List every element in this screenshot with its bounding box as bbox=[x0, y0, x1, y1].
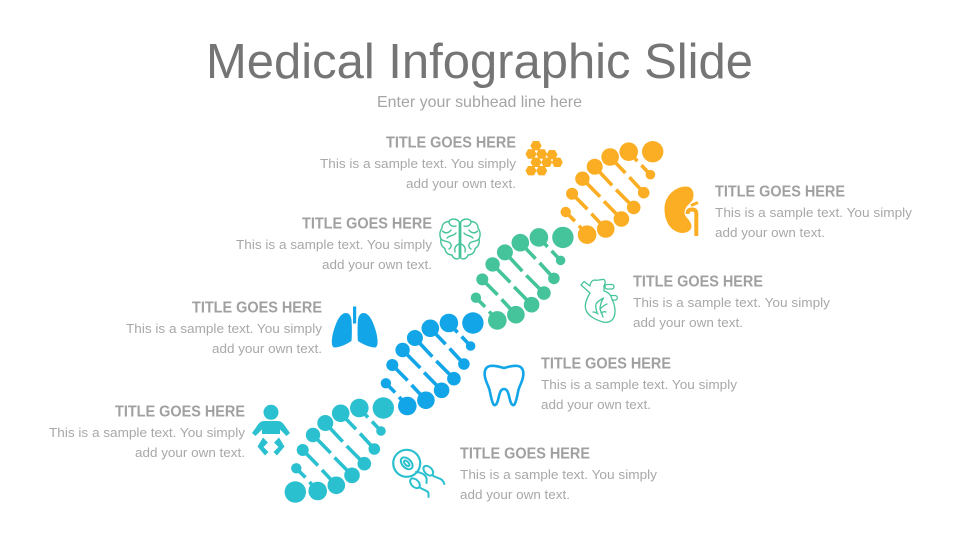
text block: brain: add your own text. bbox=[322, 257, 432, 272]
text block: egg and sperm: TITLE GOES HERE bbox=[460, 446, 590, 462]
subhead: Enter your subhead line here bbox=[377, 94, 582, 111]
text block: lungs: TITLE GOES HERE bbox=[192, 300, 322, 316]
icon: honeycomb bbox=[526, 141, 563, 175]
text block: lungs: add your own text. bbox=[212, 341, 322, 356]
text block: baby: add your own text. bbox=[135, 445, 245, 460]
text block: tooth: add your own text. bbox=[541, 397, 651, 412]
text block: heart: add your own text. bbox=[633, 315, 743, 330]
title: Medical Infographic Slide bbox=[206, 35, 753, 89]
DNA segment: blue bbox=[381, 312, 484, 415]
text block: kidney: TITLE GOES HERE bbox=[715, 184, 845, 200]
text block: top left-center: TITLE GOES HERE bbox=[386, 134, 516, 152]
text block: egg and sperm bbox=[460, 446, 658, 502]
icon: egg and sperm bbox=[393, 450, 444, 497]
text block: lungs: This is a sample text. You simply bbox=[126, 321, 323, 336]
text block: tooth: TITLE GOES HERE bbox=[541, 356, 671, 372]
text block: egg and sperm: This is a sample text. You simply bbox=[460, 467, 658, 482]
text block: brain: TITLE GOES HERE bbox=[302, 216, 432, 232]
text block: brain: This is a sample text. You simply bbox=[236, 237, 433, 252]
text block: egg and sperm: add your own text. bbox=[460, 487, 570, 502]
icon: tooth bbox=[485, 366, 523, 405]
text block: brain bbox=[236, 216, 433, 272]
icon: kidney bbox=[664, 186, 698, 236]
text block: heart bbox=[633, 274, 831, 330]
text block: top left-center: add your own text. bbox=[406, 176, 516, 191]
text block: baby bbox=[49, 404, 246, 460]
text block: kidney: This is a sample text. You simply bbox=[715, 205, 913, 220]
DNA segment: yellow bbox=[560, 141, 663, 244]
icon: lungs bbox=[332, 306, 378, 348]
text block: top left-center bbox=[320, 134, 517, 191]
text block: heart: This is a sample text. You simply bbox=[633, 295, 831, 310]
text block: tooth bbox=[541, 356, 738, 412]
text block: tooth: This is a sample text. You simply bbox=[541, 377, 738, 392]
text block: baby: This is a sample text. You simply bbox=[49, 425, 246, 440]
text block: lungs bbox=[126, 300, 323, 356]
text block: top left-center: This is a sample text. You simply bbox=[320, 156, 517, 171]
icon: brain bbox=[440, 219, 480, 259]
text block: baby: TITLE GOES HERE bbox=[115, 404, 245, 420]
icon: baby bbox=[252, 405, 290, 456]
DNA segment: teal bbox=[285, 397, 394, 503]
text block: kidney: add your own text. bbox=[715, 225, 825, 240]
DNA segment: green bbox=[471, 227, 574, 330]
text block: kidney bbox=[715, 184, 913, 240]
icon: heart bbox=[581, 279, 617, 322]
text block: heart: TITLE GOES HERE bbox=[633, 274, 763, 290]
